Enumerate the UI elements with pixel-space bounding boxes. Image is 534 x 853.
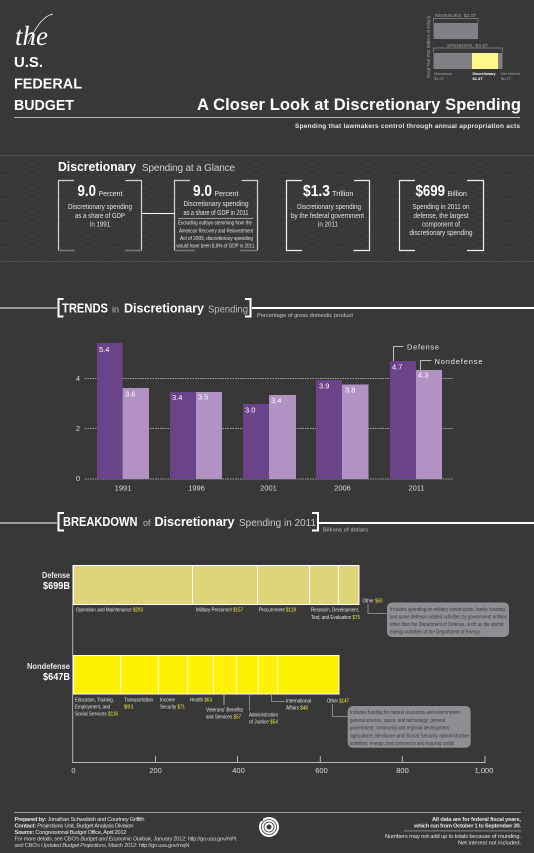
breakdown heading: [0, 513, 534, 534]
2001 bars: 3.0: [245, 406, 255, 414]
chart axis: 1,000: [475, 766, 493, 775]
breakdown heading: Spending in 2011: [239, 518, 316, 529]
series title: [14, 14, 82, 114]
bar chart: defense and nondefense share of GDP: 2: [76, 424, 80, 433]
mini budget chart: SPENDING, $3.6T: [447, 43, 488, 48]
stat box: 2011 share of GDP: as a share of GDP in 2011: [184, 210, 249, 217]
series title: the: [15, 21, 48, 51]
mini budget chart: Net Interest: [501, 71, 521, 76]
1991 bars: 1991: [115, 484, 131, 492]
stat box: 1991 share of GDP: in 1991: [90, 222, 110, 228]
2006 bars: 3.8: [345, 386, 355, 394]
chart axis: 800: [396, 766, 409, 775]
footer credits: For more details, see CBO's Budget and Economic Outlook, January 2012: http://go.usa.gov/mPt: [14, 836, 237, 842]
footer notes: [385, 817, 521, 846]
callout: defense other: energy activities of the Department of Energy.: [390, 630, 481, 636]
nondefense bar: Employment, and: [75, 704, 110, 710]
footer notes: Net interest not included.: [458, 840, 521, 846]
stat box: 699 billion: discretionary spending: [410, 230, 473, 237]
stat box: 2011 share of GDP: Act of 2009, discretionary spending: [180, 236, 253, 242]
callout: nondefense other: activities; energy; and commerce and housing credit.: [350, 741, 455, 747]
trends heading: Discretionary: [124, 300, 205, 316]
1996 bars: 3.4: [172, 393, 182, 402]
stat box: 2011 share of GDP: Discretionary spending: [184, 201, 249, 208]
2011 bars: 4.7: [392, 362, 402, 372]
trends heading: Percentage of gross domestic product: [257, 313, 353, 319]
defense bar: Other $50: [362, 598, 382, 604]
stat box: 2011 share of GDP: Excluding outlays stemming from the: [178, 220, 252, 226]
footer notes: All data are for federal fiscal years,: [432, 817, 521, 823]
chart axis: 0: [71, 766, 76, 775]
defense bar: Research, Development,: [311, 608, 359, 614]
nondefense bar: Social Services $116: [75, 712, 118, 718]
mini budget chart: [426, 13, 521, 81]
stat box: 2011 share of GDP: Percent: [214, 189, 239, 198]
nondefense bar: Administration: [249, 712, 278, 718]
nondefense bar: [27, 655, 471, 748]
nondefense bar: Nondefense: [27, 662, 71, 671]
callout: nondefense other: agriculture; Medicare and Social Security administrative: [350, 734, 469, 740]
defense bar: Test, and Evaluation $75: [311, 615, 360, 621]
2006 bars: 3.9: [319, 382, 329, 390]
1991 bars: 5.4: [99, 345, 109, 354]
stat box: 1.3 trillion: Trillion: [332, 189, 354, 198]
stat box: 2011 share of GDP: 9.0: [193, 183, 212, 200]
breakdown heading: BREAKDOWN: [63, 514, 138, 529]
defense bar: [42, 565, 509, 637]
breakdown heading: of: [143, 518, 151, 528]
callout: nondefense other: general science, space, and technology; general: [350, 718, 445, 724]
series title: U.S.: [14, 54, 43, 71]
icon: CBO logo: [259, 815, 279, 837]
nondefense bar: Transportation: [124, 698, 153, 704]
mini budget chart: Mandatory: [434, 71, 452, 76]
bar chart: defense and nondefense share of GDP: 0: [76, 474, 80, 483]
defense bar: Operation and Maintenance $293: [76, 608, 143, 614]
callout: defense other: other than the Department of Defense, such as the atomic: [390, 622, 504, 628]
stat box: 1991 share of GDP: [58, 180, 142, 250]
stat box: 1.3 trillion: by the federal government: [291, 213, 364, 220]
2006 bars: [316, 380, 368, 492]
stat box: 699 billion: [400, 180, 484, 250]
section: breakdown: [0, 513, 534, 775]
nondefense bar: Affairs $48: [286, 706, 308, 712]
2001 bars: 2001: [260, 484, 277, 492]
1996 bars: 1996: [188, 484, 205, 492]
stat box: 699 billion: Spending in 2011 on: [412, 204, 470, 211]
nondefense bar: Health $63: [190, 698, 212, 704]
nondefense bar: Security $71: [160, 704, 185, 710]
bar chart: defense and nondefense share of GDP: 4: [76, 374, 80, 383]
glance heading: Discretionary: [58, 160, 136, 174]
stat box: 1.3 trillion: [286, 180, 370, 250]
nondefense bar: Income: [160, 698, 175, 704]
section: discretionary at a glance: [58, 160, 484, 250]
defense bar: Procurement $128: [259, 608, 296, 614]
2001 bars: 3.4: [271, 396, 281, 405]
nondefense bar: Education, Training,: [75, 698, 114, 704]
1991 bars: 3.6: [125, 390, 135, 398]
nondefense bar: Other $147: [327, 698, 349, 704]
nondefense bar: $647B: [43, 672, 70, 683]
nondefense bar: Veterans' Benefits: [206, 708, 243, 714]
callout: nondefense other: [348, 706, 471, 748]
series title: BUDGET: [14, 97, 74, 114]
mini budget chart: Fiscal Year 2011 (Billions of dollars): [426, 16, 431, 78]
2011 bars: [390, 361, 442, 492]
stat box: 1991 share of GDP: Discretionary spending: [68, 204, 132, 211]
1996 bars: [170, 392, 222, 492]
trends heading: TRENDS: [62, 300, 108, 316]
footer credits: Source: Congressional Budget Office, April 2012: [14, 830, 126, 836]
breakdown heading: Billions of dollars: [323, 528, 368, 534]
footer credits: and CBO's Updated Budget Projections, March 2012: http://go.usa.gov/mqN: [14, 843, 190, 849]
stat box: 699 billion: component of: [422, 222, 460, 228]
mini budget chart: $0.2T: [501, 76, 512, 81]
stat box: 699 billion: defense, the largest: [414, 213, 469, 220]
footer notes: Numbers may not add up to totals because of rounding.: [385, 834, 521, 840]
2001 bars: [243, 395, 296, 492]
footer credits: Prepared by: Jonathan Schwabish and Courtney Griffith: [14, 817, 144, 823]
defense bar: Military Personnel $157: [196, 608, 243, 614]
glance heading: Spending at a Glance: [142, 163, 235, 174]
series labels: Nondefense: [434, 357, 482, 366]
nondefense bar: of Justice $54: [249, 720, 279, 726]
stat box: 1.3 trillion: in 2011: [318, 222, 338, 228]
glance band background: [0, 155, 534, 262]
callout: nondefense other: Includes funding for natural resources and environment;: [350, 710, 461, 716]
stat box: 2011 share of GDP: would have been 8.6% of GDP in 2011.: [176, 244, 256, 250]
stat box: 1.3 trillion: Discretionary spending: [297, 204, 361, 211]
stat box: 699 billion: Billion: [448, 189, 467, 198]
nondefense bar: and Services $57: [206, 714, 241, 720]
subheading: Spending that lawmakers control through annual appropriation acts: [295, 123, 520, 130]
chart axis: 400: [232, 766, 245, 775]
stat box: 1991 share of GDP: 9.0: [78, 183, 96, 200]
chart axis: [71, 565, 493, 775]
main heading: A Closer Look at Discretionary Spending: [197, 96, 521, 114]
footer credits: [14, 817, 237, 849]
2011 bars: 4.3: [418, 370, 428, 380]
callout: nondefense other: government; community and regional development;: [350, 726, 450, 732]
footer: [14, 812, 521, 849]
breakdown heading: Discretionary: [154, 514, 235, 529]
stat box: 2011 share of GDP: American Recovery and Reinvestment: [179, 228, 253, 234]
series labels: Defense: [407, 342, 439, 352]
trends heading: in: [112, 304, 119, 314]
footer credits: Contact: Projections Unit, Budget Analysis Division: [14, 824, 134, 830]
1991 bars: [97, 343, 149, 492]
callout: defense other: Includes spending on military construction, family housing,: [390, 607, 506, 613]
trends heading: Spending: [208, 304, 248, 316]
section: trends: [0, 299, 534, 492]
stat box: 2011 share of GDP: [174, 180, 258, 250]
callout: defense other: [387, 602, 509, 637]
2011 bars: 2011: [408, 484, 425, 492]
callout: defense other: and some defense-related activities by government entities: [390, 614, 507, 620]
chart axis: 600: [315, 766, 328, 775]
defense bar: Defense: [42, 571, 70, 580]
mini budget chart: $1.3T: [472, 76, 483, 81]
connector: [142, 213, 174, 214]
mini budget chart: $2.0T: [434, 76, 445, 81]
stat box: 1991 share of GDP: as a share of GDP: [75, 213, 125, 220]
stat box: 1.3 trillion: $1.3: [303, 183, 330, 200]
2006 bars: 2006: [334, 484, 351, 492]
mini budget chart: Discretionary: [472, 71, 496, 76]
series labels: [394, 342, 482, 370]
chart axis: 200: [149, 766, 162, 775]
footer notes: which run from October 1 to September 30.: [413, 824, 521, 830]
1996 bars: 3.5: [198, 392, 208, 402]
trends heading: [0, 299, 534, 319]
nondefense bar: International: [286, 698, 311, 704]
bar chart: defense and nondefense share of GDP: [76, 342, 482, 492]
glance heading: [58, 160, 235, 174]
series title: FEDERAL: [14, 76, 82, 92]
header: [14, 13, 521, 130]
mini budget chart: REVENUES, $2.3T: [435, 13, 476, 18]
defense bar: $699B: [43, 581, 70, 592]
nondefense bar: $91: [124, 704, 134, 710]
stat box: 699 billion: $699: [416, 183, 445, 200]
stat box: 1991 share of GDP: Percent: [98, 189, 123, 198]
